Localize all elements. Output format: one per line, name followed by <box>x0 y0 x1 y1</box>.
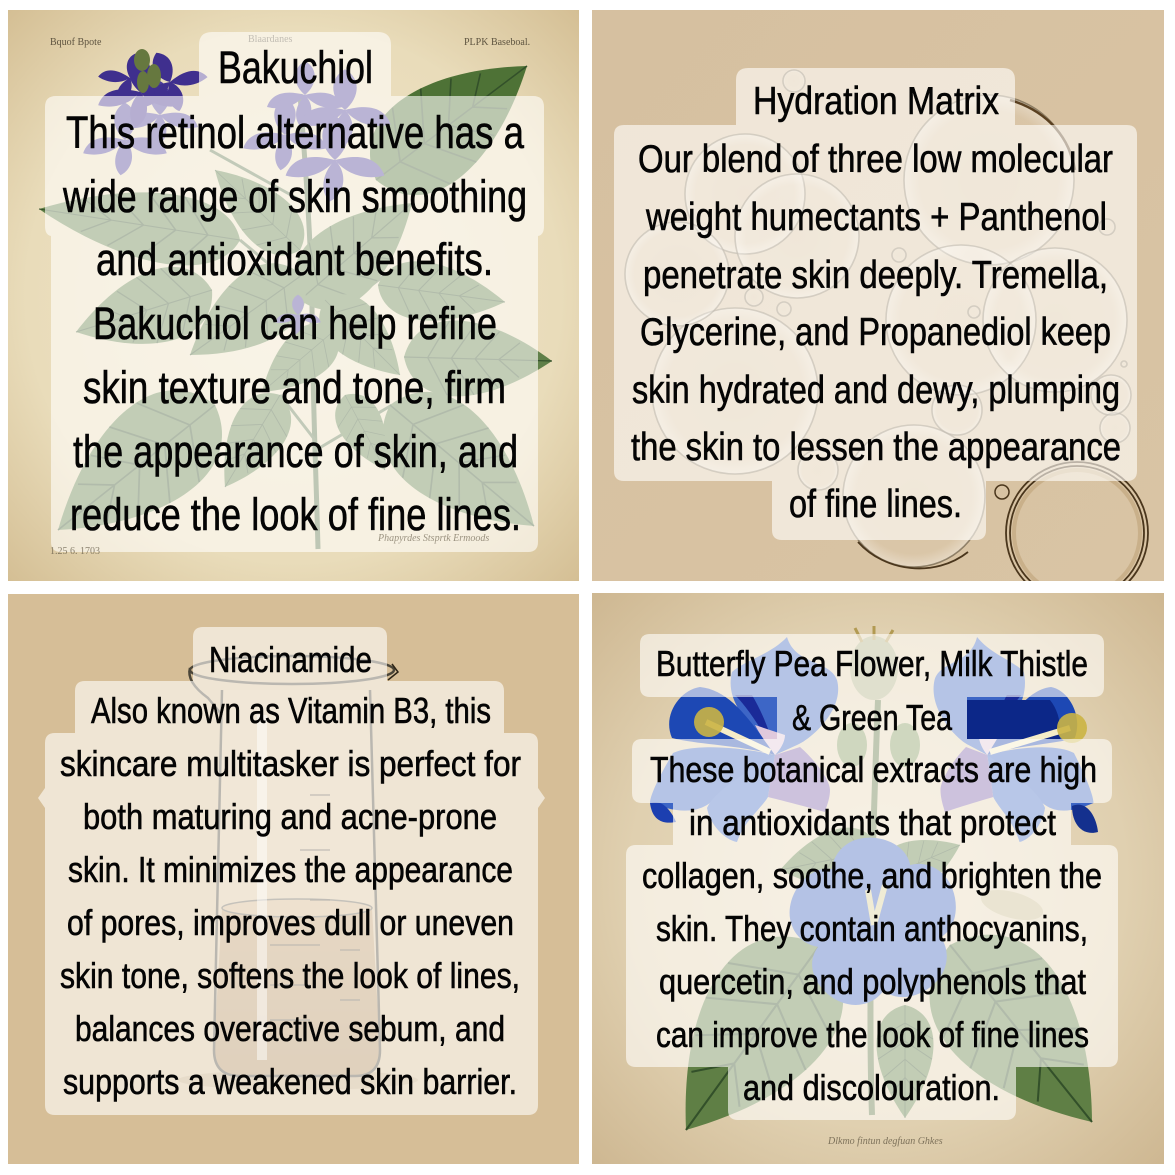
body text: and discolouration. <box>743 1067 1000 1108</box>
body text: reduce the look of fine lines. <box>70 489 521 540</box>
body text: wide range of skin smoothing <box>62 171 527 222</box>
illustration: water bubbles <box>625 70 1148 604</box>
panel: Hydration Matrix <box>592 10 1164 604</box>
illustration: butterfly pea flowers <box>634 626 1098 1131</box>
panel: Niacinamide <box>8 594 579 1164</box>
body text: collagen, soothe, and brighten the <box>642 855 1102 896</box>
body text: skin. They contain anthocyanins, <box>656 908 1088 949</box>
heading: Niacinamide <box>209 639 372 680</box>
body text: supports a weakened skin barrier. <box>63 1061 517 1102</box>
caption: signature: Phapyrdes Stsprtk Ermoods <box>377 533 489 544</box>
body text: Also known as Vitamin B3, this <box>91 690 491 731</box>
right flower <box>934 637 1094 842</box>
caption: bottom left: 1.25 6. 1703 <box>50 546 100 557</box>
illustration: bakuchiol plant <box>26 27 565 570</box>
body text: can improve the look of fine lines <box>656 1014 1089 1055</box>
label boxes <box>45 627 538 1115</box>
notches <box>38 788 545 808</box>
body text: Bakuchiol can help refine <box>93 298 497 349</box>
heading: Butterfly Pea Flower, Milk Thistle <box>656 643 1088 684</box>
body text: and antioxidant benefits. <box>96 234 493 285</box>
panel background <box>8 594 579 1164</box>
body text: balances overactive sebum, and <box>75 1008 505 1049</box>
left flower <box>650 637 838 842</box>
body text: This retinol alternative has a <box>66 107 525 158</box>
body text <box>642 749 1102 1108</box>
label boxes <box>45 32 544 552</box>
panel: Bakuchiol <box>8 10 579 581</box>
caption: signature: Dlkmo fintun degfuan Ghkes <box>827 1136 943 1147</box>
body text: skin. It minimizes the appearance <box>68 849 513 890</box>
illustration: glass beaker <box>178 656 418 1090</box>
body text: These botanical extracts are high <box>650 749 1097 790</box>
panel: Butterfly Pea Flower, Milk Thistle and Green Tea <box>592 593 1164 1168</box>
body text <box>60 690 521 1102</box>
body text: both maturing and acne-prone <box>83 796 497 837</box>
panel background <box>8 10 579 581</box>
body text: skincare multitasker is perfect for <box>60 743 521 784</box>
body text: skin texture and tone, firm <box>83 362 506 413</box>
caption: top centre: Blaardanes <box>248 34 293 45</box>
panel background <box>592 593 1164 1164</box>
heading: Hydration Matrix <box>753 80 999 123</box>
body text <box>631 138 1121 526</box>
body text: the appearance of skin, and <box>73 426 518 477</box>
heading: & Green Tea <box>792 697 953 738</box>
body text: of pores, improves dull or uneven <box>67 902 514 943</box>
body text: skin tone, softens the look of lines, <box>60 955 520 996</box>
panel background <box>592 10 1164 581</box>
body text: of fine lines. <box>789 483 962 526</box>
label boxes <box>626 634 1118 1120</box>
heading: Bakuchiol <box>218 42 373 93</box>
body text: weight humectants + Panthenol <box>645 196 1107 239</box>
caption: top left: Bquof Bpote <box>50 37 102 48</box>
label boxes <box>614 68 1137 540</box>
caption: top right: PLPK Baseboal. <box>464 37 530 48</box>
body text <box>62 107 527 540</box>
body text: quercetin, and polyphenols that <box>659 961 1086 1002</box>
body text: in antioxidants that protect <box>689 802 1056 843</box>
heading <box>656 643 1088 738</box>
